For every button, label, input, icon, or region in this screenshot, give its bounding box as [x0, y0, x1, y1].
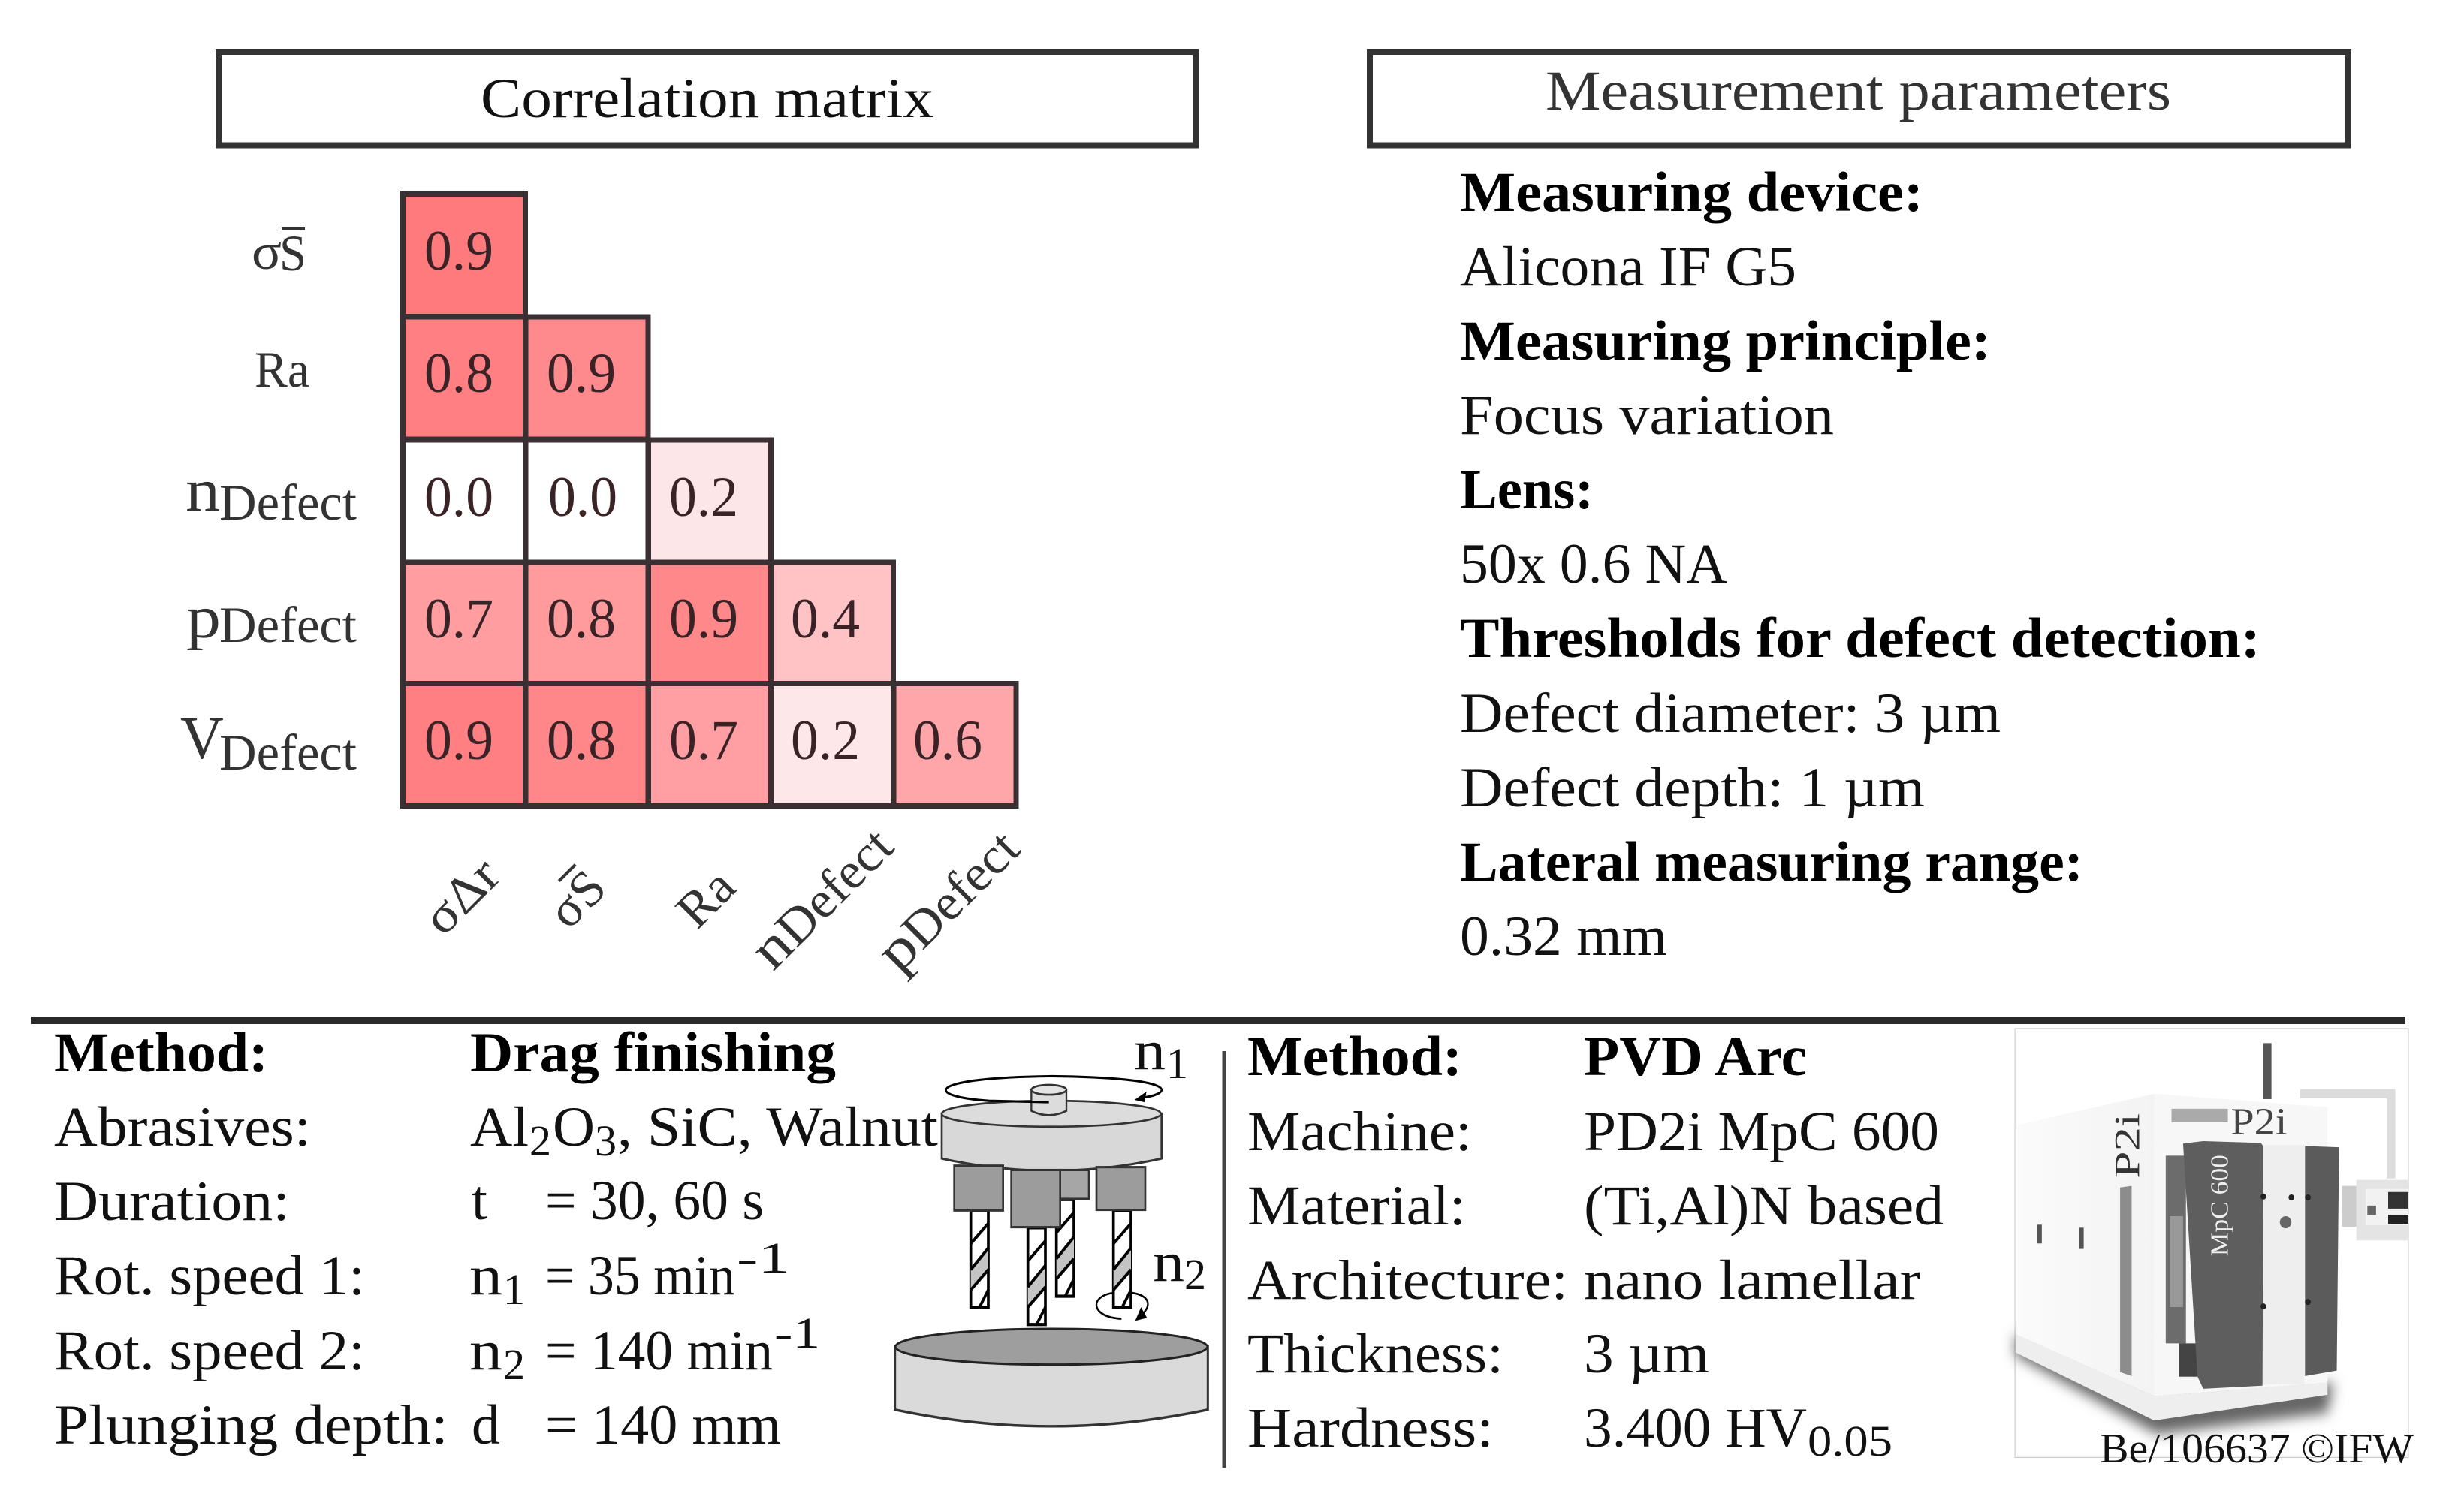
hub	[1031, 1085, 1066, 1115]
method values: = 30, 60 s	[545, 1170, 764, 1232]
heatmap values: 0.4	[791, 588, 860, 650]
parameter list	[1460, 161, 2260, 968]
column labels: σ	[536, 879, 596, 939]
photo: PVD coating machine: P2i	[2107, 1113, 2147, 1179]
heatmap values: 0.9	[424, 220, 493, 282]
method values: -1	[774, 1309, 820, 1357]
coating values: PVD Arc	[1584, 1026, 1807, 1088]
heatmap values: 0.8	[547, 709, 616, 772]
coating values: 0.05	[1808, 1417, 1892, 1465]
parameter list: Defect diameter: 3 µm	[1460, 682, 2001, 745]
panel: drag finishing method	[54, 1020, 1208, 1456]
method values: 2	[529, 1116, 551, 1165]
column labels	[411, 814, 1031, 983]
label: n1: n	[1134, 1020, 1166, 1082]
coating values: PD2i MpC 600	[1584, 1101, 1939, 1163]
row labels: n	[185, 458, 220, 524]
method values: d	[472, 1394, 500, 1456]
arrow: tool rotation n2	[1096, 1293, 1148, 1321]
heading box: measurement parameters: Measurement parameters	[1546, 60, 2171, 122]
method values: n	[469, 1320, 502, 1382]
heatmap values: 0.8	[547, 588, 616, 650]
photo: PVD coating machine	[2015, 1029, 2414, 1472]
method values: 2	[503, 1340, 525, 1389]
parameter list: Focus variation	[1460, 384, 1834, 447]
column labels: σΔr	[411, 845, 511, 946]
heatmap values: 0.9	[547, 342, 616, 405]
heatmap values: 0.8	[424, 342, 493, 405]
illustration: drag finishing machine	[895, 1020, 1208, 1426]
coating values: 3.400 HV	[1584, 1397, 1807, 1459]
parameter list: Measuring principle:	[1460, 310, 1991, 372]
method values	[469, 1022, 938, 1456]
heatmap values: 0.2	[669, 466, 738, 529]
coating labels: Thickness:	[1247, 1323, 1503, 1385]
method labels: Plunging depth:	[54, 1394, 448, 1456]
heatmap cells	[403, 194, 1016, 806]
coating labels: Architecture:	[1247, 1249, 1568, 1312]
holder disc	[942, 1101, 1162, 1170]
arrow: main rotation n1	[945, 1076, 1162, 1102]
media bowl	[895, 1329, 1208, 1426]
column labels: S	[556, 858, 617, 919]
label: n2	[1153, 1231, 1206, 1299]
vertical divider	[1223, 1051, 1226, 1468]
row labels: V	[180, 706, 224, 772]
heading box: measurement parameters	[1370, 52, 2348, 146]
coating values: nano lamellar	[1584, 1249, 1920, 1312]
panel: correlation matrix	[180, 52, 1196, 983]
method labels: Method:	[54, 1022, 268, 1084]
parameter list: 0.32 mm	[1460, 905, 1667, 968]
photo credit: Be/106637 ©IFW	[2100, 1426, 2414, 1472]
method labels: Duration:	[54, 1170, 290, 1233]
heatmap values: 0.2	[791, 709, 860, 772]
column labels: Ra	[665, 857, 746, 939]
heatmap values: 0.0	[548, 466, 617, 529]
parameter list: Defect depth: 1 µm	[1460, 757, 1925, 819]
method values: 1	[503, 1265, 525, 1314]
parameter list: Thresholds for defect detection:	[1460, 607, 2260, 670]
coating labels: Machine:	[1247, 1101, 1472, 1163]
label: n1: 1	[1166, 1039, 1188, 1088]
heatmap values: 0.9	[669, 588, 738, 650]
method values: Drag finishing	[470, 1022, 836, 1084]
method values: = 140 mm	[545, 1394, 781, 1456]
column labels: p	[864, 916, 931, 983]
method labels	[54, 1022, 448, 1456]
row labels: S	[279, 224, 306, 282]
photo: PVD coating machine: P2i	[2230, 1101, 2287, 1143]
parameter list: Lateral measuring range:	[1460, 831, 2083, 893]
row labels	[180, 223, 357, 781]
method labels: Rot. speed 2:	[54, 1320, 365, 1382]
heatmap values: 0.6	[913, 709, 982, 772]
method values: = 140 min	[545, 1320, 773, 1382]
method labels: Abrasives:	[54, 1096, 311, 1158]
method values: O	[553, 1096, 595, 1158]
parameter list: Measuring device:	[1460, 161, 1923, 224]
row labels: Ra	[255, 341, 309, 398]
drills	[955, 1166, 1145, 1324]
label: n1	[1134, 1020, 1188, 1088]
column labels: n	[737, 914, 805, 981]
heading box: correlation matrix	[219, 52, 1196, 146]
parameter list: Alicona IF G5	[1460, 236, 1796, 298]
method labels: Rot. speed 1:	[54, 1245, 365, 1307]
row labels: Defect	[219, 724, 357, 781]
method values: Al	[470, 1096, 529, 1158]
row labels: Defect	[219, 596, 357, 653]
method values: n	[469, 1245, 502, 1307]
coating labels: Hardness:	[1247, 1397, 1494, 1459]
coating labels: Material:	[1247, 1175, 1466, 1237]
panel: measurement parameters	[1370, 52, 2348, 968]
coating labels: Method:	[1247, 1026, 1462, 1088]
label: n2: n	[1153, 1231, 1184, 1294]
coating values: 3 µm	[1584, 1323, 1709, 1385]
heatmap values	[424, 220, 982, 772]
photo: PVD coating machine: MpC 600	[2206, 1155, 2233, 1256]
horizontal divider	[31, 1017, 2405, 1024]
row labels: σ	[252, 223, 282, 280]
parameter list: 50x 0.6 NA	[1460, 533, 1727, 595]
coating labels	[1247, 1026, 1568, 1459]
heatmap values: 0.7	[424, 588, 493, 650]
method values: -1	[737, 1233, 790, 1282]
heatmap values: 0.9	[424, 709, 493, 772]
column labels: Defect	[764, 817, 904, 956]
column labels: Defect	[890, 819, 1030, 959]
heatmap values: 0.0	[424, 466, 493, 529]
coating values	[1584, 1026, 1944, 1465]
label: n2: 2	[1184, 1250, 1206, 1299]
method values: t	[472, 1170, 487, 1232]
method values: , SiC, Walnut	[617, 1096, 938, 1158]
method values: 3	[595, 1116, 617, 1165]
coating values: (Ti,Al)N based	[1584, 1175, 1944, 1237]
parameter list: Lens:	[1460, 459, 1594, 521]
row labels: Defect	[219, 474, 357, 531]
heading box: correlation matrix: Correlation matrix	[481, 68, 933, 130]
row labels: p	[186, 585, 221, 651]
method values: = 35 min	[545, 1245, 735, 1307]
panel: PVD arc method	[1247, 1026, 2414, 1472]
heatmap values: 0.7	[669, 709, 738, 772]
